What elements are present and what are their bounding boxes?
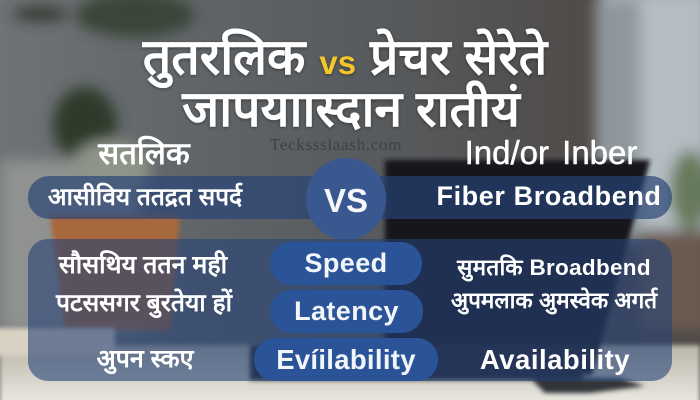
left cell: speed text: सौसथिय ततन मही [59, 251, 227, 279]
VS badge [306, 158, 386, 240]
right cell: availability text: Availability [480, 344, 630, 375]
comparison panel [28, 239, 672, 381]
pill: speed [270, 242, 422, 285]
header band [28, 176, 672, 219]
pill: latency [270, 290, 423, 333]
watermark: Teckssslaash.com [270, 135, 402, 154]
books [0, 328, 115, 356]
VS badge: VS [324, 182, 368, 219]
left column heading: सतलिक [98, 136, 190, 171]
left cell: availability text: अुपन स्कए [97, 345, 193, 373]
pill: speed: Speed [304, 248, 388, 278]
title line 1: तुतरलिक vs प्रेचर सेरेते [143, 29, 547, 85]
left header label: आसीविय ततद्रत सपर्द [48, 184, 242, 211]
title [140, 28, 550, 137]
laptop [250, 160, 650, 393]
pill: latency: Latency [294, 296, 399, 326]
title line 2: जापयाास्दान रातीयं [182, 81, 520, 137]
pill: availability [254, 338, 438, 381]
right cell: speed text: सुमतकि Broadbend [457, 255, 651, 280]
plant pot [50, 215, 180, 330]
right header label: Fiber Broadbend [436, 181, 662, 211]
right cell: latency text: अुपमलाक अुमस्वेक अगर्त [451, 288, 657, 313]
right column heading: Ind/or Inber [465, 134, 637, 171]
desk surface [0, 345, 700, 400]
pill: availability: Evíilability [276, 344, 416, 375]
left cell: latency text: पटससगर बुरतेया हों [56, 290, 232, 317]
